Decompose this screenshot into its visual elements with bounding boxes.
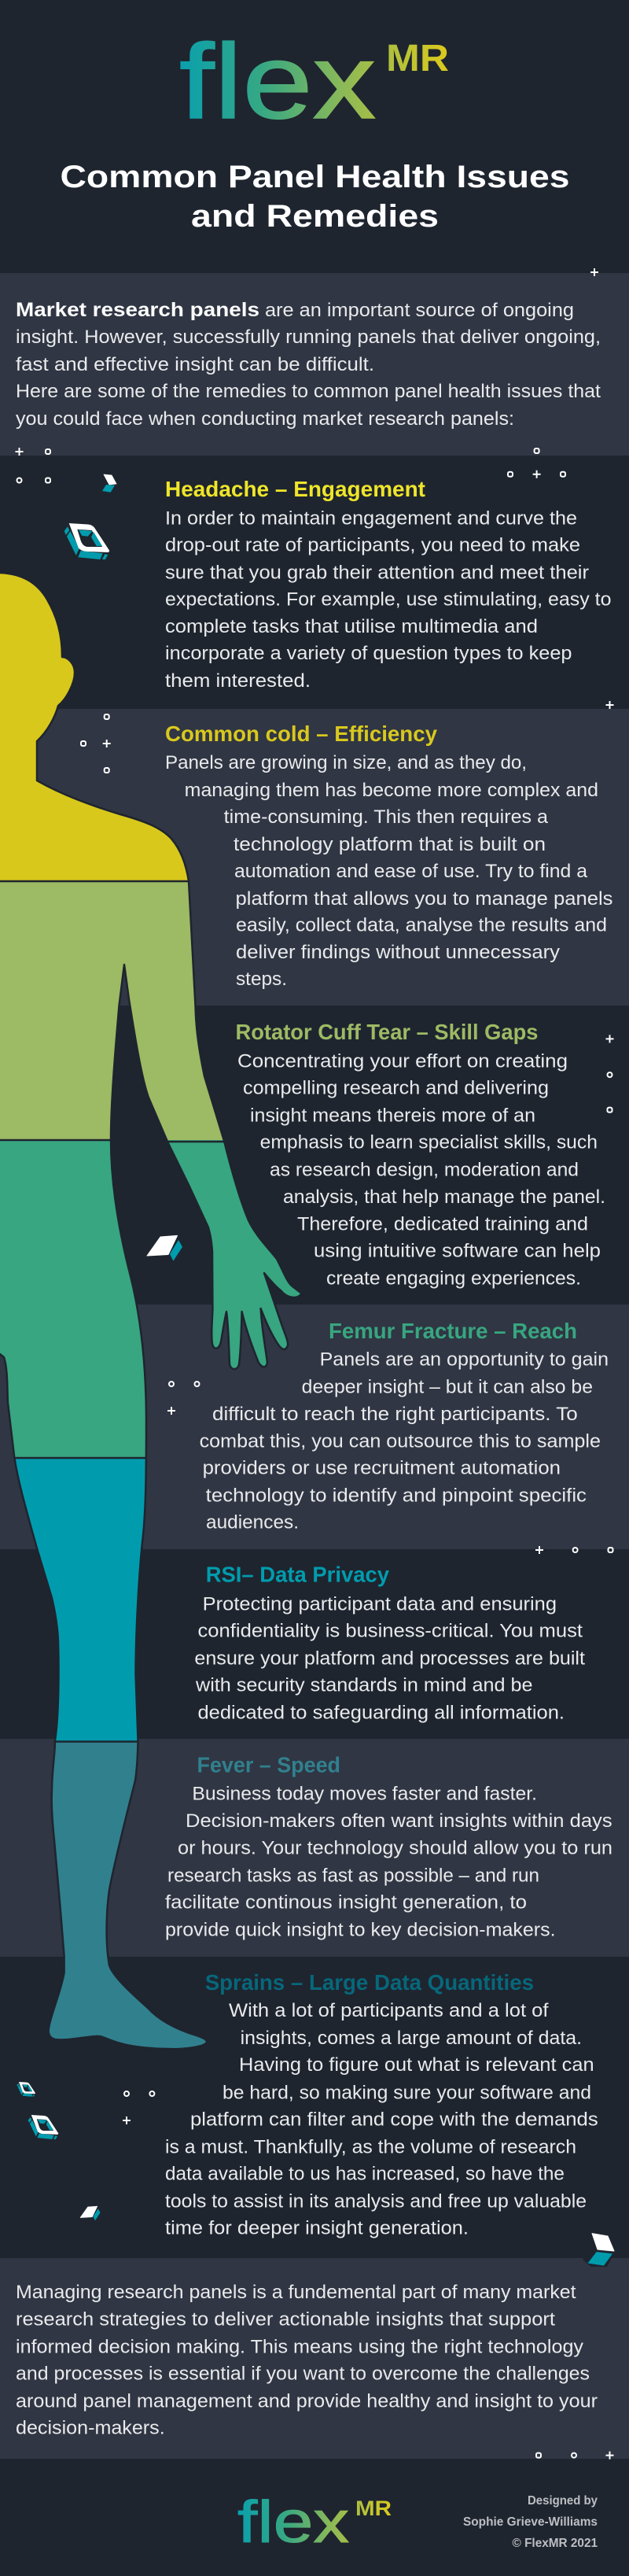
section: Sprains - Large Data Quantities — [165, 1970, 598, 2239]
panel: femur fracture band — [0, 1305, 629, 1549]
text block: introduction: Here are some of the remedies to common panel health issues that — [16, 381, 601, 402]
section: Headache - Engagement: complete tasks that utilise multimedia and — [165, 616, 538, 637]
section: Common cold - Efficiency: Common cold – Efficiency — [165, 722, 437, 746]
text block: closing paragraph: and processes is essential if you want to overcome the challenges — [16, 2363, 590, 2384]
text block: closing paragraph: decision-makers. — [16, 2417, 165, 2439]
section: RSI - Data Privacy: dedicated to safeguarding all information. — [198, 1702, 565, 1723]
title — [60, 160, 569, 234]
section: Common cold - Efficiency: technology platform that is built on — [234, 834, 546, 855]
panel: intro band — [0, 273, 629, 456]
section: Femur Fracture - Reach: providers or use recruitment automation — [203, 1458, 561, 1479]
section: Rotator Cuff Tear - Skill Gaps: insight means thereis more of an — [250, 1105, 535, 1126]
icon: slab block beside arm — [147, 1235, 182, 1261]
panel: fever band — [0, 1739, 629, 1957]
text block: closing paragraph — [16, 2282, 598, 2439]
section: Fever - Speed: Fever – Speed — [197, 1753, 340, 1777]
section: Common cold - Efficiency: time-consuming. This then requires a — [224, 806, 549, 828]
section: Sprains - Large Data Quantities: Having to figure out what is relevant can — [239, 2054, 594, 2076]
panel: common cold band — [0, 709, 629, 1006]
section: Sprains - Large Data Quantities: data available to us has increased, so have the — [165, 2163, 565, 2184]
text block: introduction: are an important source of ongoing — [265, 300, 574, 321]
section: Rotator Cuff Tear - Skill Gaps: Therefore, dedicated training and — [297, 1213, 588, 1234]
section: Headache - Engagement: sure that you grab their attention and meet their — [165, 562, 589, 583]
text block: introduction — [16, 299, 601, 430]
section: Rotator Cuff Tear - Skill Gaps: analysis, that help manage the panel. — [283, 1187, 605, 1208]
section: Fever - Speed: provide quick insight to key decision-makers. — [165, 1919, 556, 1940]
section: Sprains - Large Data Quantities: be hard, so making sure your software and — [223, 2082, 591, 2104]
logo: flexMR footer — [237, 2489, 392, 2555]
section: Common cold - Efficiency: Panels are growing in size, and as they do, — [165, 752, 527, 773]
section: Femur Fracture - Reach: audiences. — [206, 1511, 299, 1533]
footer credits: © FlexMR 2021 — [513, 2537, 598, 2550]
text block: closing paragraph: research strategies to deliver actionable insights that support — [16, 2308, 555, 2331]
text block: closing paragraph: informed decision making. This means using the right technology — [16, 2336, 583, 2357]
section: Sprains - Large Data Quantities: Sprains – Large Data Quantities — [205, 1970, 534, 1995]
section: Fever - Speed: or hours. Your technology should allow you to run — [178, 1838, 612, 1858]
logo: flexMR header: MR — [386, 38, 449, 79]
section: Rotator Cuff Tear - Skill Gaps: as research design, moderation and — [270, 1160, 579, 1181]
section: Femur Fracture - Reach: combat this, you can outsource this to sample — [200, 1431, 601, 1452]
section: Sprains - Large Data Quantities: insights, comes a large amount of data. — [241, 2028, 582, 2049]
section: Fever - Speed: Business today moves faster and faster. — [192, 1783, 537, 1804]
section: Fever - Speed: facilitate continous insight generation, to — [165, 1891, 527, 1914]
icon: small slab block lower — [80, 2206, 101, 2220]
section: Sprains - Large Data Quantities: With a lot of participants and a lot of — [229, 2000, 549, 2021]
section: Rotator Cuff Tear - Skill Gaps — [236, 1020, 605, 1289]
section: Common cold - Efficiency: steps. — [236, 969, 287, 990]
section: Sprains - Large Data Quantities: is a must. Thankfully, as the volume of research — [165, 2136, 576, 2157]
section: Rotator Cuff Tear - Skill Gaps: create engaging experiences. — [326, 1268, 581, 1289]
section: Headache - Engagement: expectations. For example, use stimulating, easy to — [165, 589, 612, 610]
section: Headache - Engagement: In order to maintain engagement and curve the — [165, 508, 577, 529]
section: Common cold - Efficiency: managing them has become more complex and — [185, 780, 598, 801]
section: RSI - Data Privacy: confidentiality is business-critical. You must — [198, 1620, 583, 1641]
section: Fever - Speed: Decision-makers often want insights within days — [186, 1810, 612, 1832]
icon: chevron block on band edge — [583, 2234, 614, 2267]
section: Headache - Engagement: drop-out rate of participants, you need to make — [165, 535, 580, 555]
section: Rotator Cuff Tear - Skill Gaps: Rotator Cuff Tear – Skill Gaps — [236, 1020, 538, 1044]
text block: introduction: insight. However, successfully running panels that deliver ongoing, — [16, 327, 601, 348]
text block: introduction: you could face when conducting market research panels: — [16, 408, 514, 430]
section: Femur Fracture - Reach: technology to identify and pinpoint specific — [206, 1485, 587, 1506]
text block: introduction: fast and effective insight can be difficult. — [16, 354, 374, 375]
section: Femur Fracture - Reach: deeper insight – but it can also be — [302, 1376, 593, 1397]
icon: large ring block top — [64, 523, 109, 559]
section: Common cold - Efficiency: easily, collect data, analyse the results and — [236, 914, 607, 936]
section: Sprains - Large Data Quantities: time for deeper insight generation. — [165, 2217, 469, 2239]
section: Rotator Cuff Tear - Skill Gaps: using intuitive software can help — [314, 1241, 601, 1262]
logo: flexMR footer: flex — [237, 2489, 349, 2555]
section: Femur Fracture - Reach: difficult to reach the right participants. To — [212, 1404, 578, 1425]
icon: medium ring block lower — [28, 2115, 58, 2139]
section: Headache - Engagement: Headache – Engagement — [165, 477, 425, 501]
section: Rotator Cuff Tear - Skill Gaps: emphasis to learn specialist skills, such — [260, 1131, 598, 1153]
section: RSI - Data Privacy: with security standards in mind and be — [195, 1674, 533, 1696]
section: Common cold - Efficiency: automation and ease of use. Try to find a — [234, 861, 588, 882]
section: Headache - Engagement: them interested. — [165, 670, 311, 692]
section: RSI - Data Privacy: ensure your platform and processes are built — [194, 1648, 585, 1669]
icon: small ring block lower — [17, 2082, 35, 2097]
footer credits: Designed by — [528, 2494, 598, 2508]
text block: closing paragraph: Managing research panels is a fundemental part of many market — [16, 2282, 576, 2303]
section: RSI - Data Privacy: RSI– Data Privacy — [206, 1563, 389, 1586]
section: Femur Fracture - Reach — [200, 1319, 609, 1533]
footer credits: Sophie Grieve-Williams — [463, 2515, 598, 2529]
footer credits — [463, 2494, 598, 2550]
section: Common cold - Efficiency: platform that allows you to manage panels — [236, 888, 613, 910]
section: Fever - Speed — [165, 1753, 612, 1940]
section: Fever - Speed: research tasks as fast as possible – and run — [167, 1865, 539, 1886]
section: RSI - Data Privacy: Protecting participant data and ensuring — [203, 1593, 557, 1615]
text block: introduction: Market research panels — [16, 299, 259, 321]
section: RSI - Data Privacy — [194, 1563, 585, 1723]
section: Headache - Engagement — [165, 477, 612, 692]
section: Rotator Cuff Tear - Skill Gaps: compelling research and delivering — [243, 1078, 549, 1098]
section: Femur Fracture - Reach: Femur Fracture – Reach — [329, 1319, 577, 1343]
logo: flexMR footer: MR — [355, 2497, 392, 2520]
section: Headache - Engagement: incorporate a variety of question types to keep — [165, 643, 572, 664]
icon: small chevron block top — [102, 474, 116, 493]
section: Sprains - Large Data Quantities: platform can filter and cope with the demands — [190, 2109, 598, 2131]
text block: closing paragraph: around panel management and provide healthy and insight to your — [16, 2391, 598, 2412]
illustration: human body silhouette — [0, 573, 302, 2049]
section: Rotator Cuff Tear - Skill Gaps: Concentrating your effort on creating — [237, 1051, 568, 1072]
logo: flexMR header: flex — [179, 22, 376, 141]
section: Common cold - Efficiency: deliver findings without unnecessary — [236, 942, 560, 963]
title: Common Panel Health Issues — [60, 160, 569, 194]
section: Femur Fracture - Reach: Panels are an opportunity to gain — [320, 1349, 609, 1371]
logo: flexMR header — [179, 22, 449, 141]
section: Sprains - Large Data Quantities: tools to assist in its analysis and free up valuable — [165, 2190, 587, 2212]
section: Common cold - Efficiency — [165, 722, 613, 990]
title: and Remedies — [191, 199, 439, 234]
panel: closing band — [0, 2258, 629, 2459]
